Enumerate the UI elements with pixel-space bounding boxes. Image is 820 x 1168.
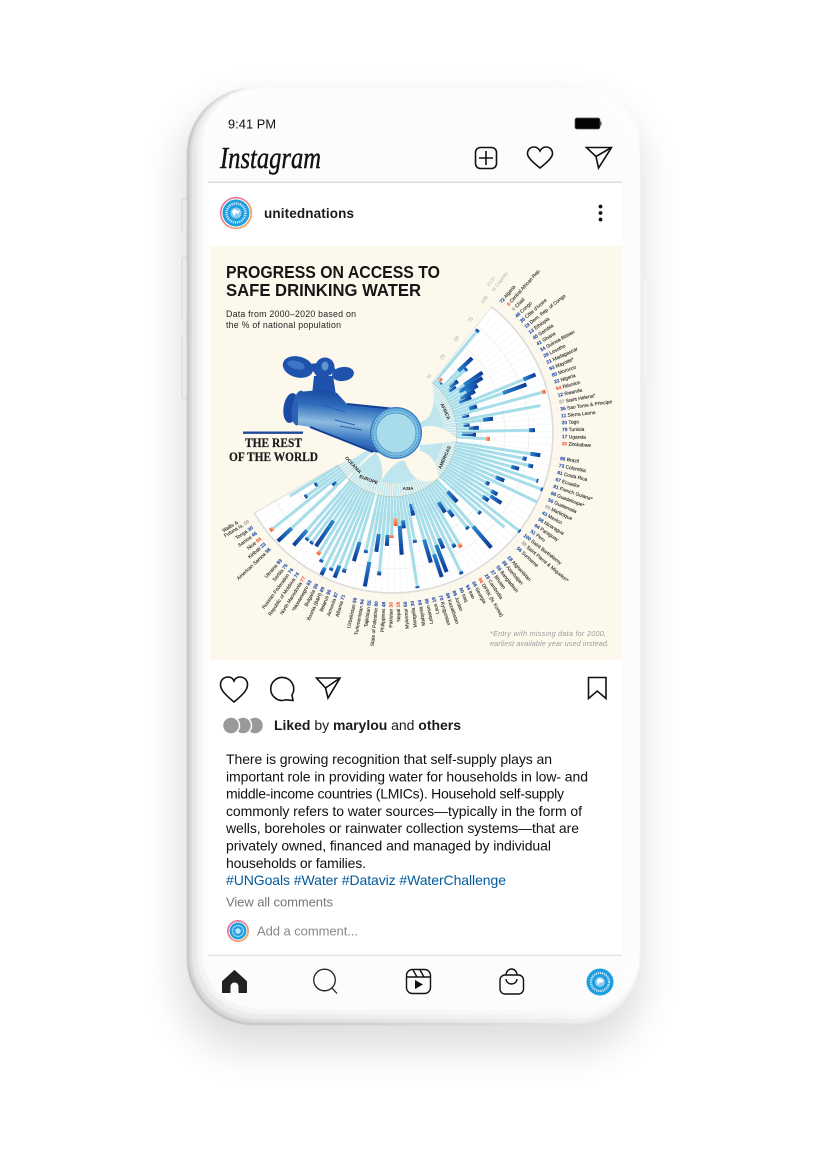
rest of the world label: THE REST bbox=[245, 436, 303, 450]
icon: top send bbox=[586, 148, 612, 168]
tap handle bbox=[280, 353, 355, 395]
country labels: Asia: 89 Kazakhstan bbox=[444, 592, 460, 625]
add comment: Add a comment... bbox=[257, 924, 358, 938]
country labels: Europe: Bulgaria 98 bbox=[304, 583, 320, 608]
icon: bookmark bbox=[588, 678, 606, 698]
axis scale labels bbox=[426, 271, 510, 380]
country labels: Europe: *Montenegro 83 bbox=[291, 579, 314, 613]
region labels: EUROPE bbox=[359, 474, 378, 485]
country labels: Africa: 93 Mayotte* bbox=[548, 357, 575, 372]
icon: share bbox=[316, 678, 340, 698]
icon: shop bag bbox=[500, 969, 524, 994]
country labels: Asia: 70 Kyrgyzstan bbox=[437, 595, 451, 626]
bars: Americas bbox=[439, 441, 543, 533]
country labels: Africa: 80 Morocco bbox=[551, 364, 577, 379]
title: PROGRESS ON ACCESS TO bbox=[226, 262, 440, 282]
bars: Africa bbox=[432, 328, 546, 441]
country labels: Asia: Philippines 48 bbox=[380, 601, 388, 632]
country labels: Africa: 13 Ethiopia bbox=[528, 316, 551, 336]
axis scale labels: 25 bbox=[439, 353, 447, 361]
axis scale labels: % bbox=[426, 373, 434, 380]
country labels: Europe: Belarus 95 bbox=[319, 589, 333, 613]
country labels: Oceania: Wallis & bbox=[221, 519, 240, 534]
country labels: Africa: 21 Madagascar bbox=[546, 346, 579, 366]
country labels: Oceania: Tonga 30 bbox=[235, 525, 255, 541]
country labels: Asia: 66 Georgia bbox=[470, 581, 487, 605]
country labels: Oceania: American Samoa 98 bbox=[236, 547, 273, 582]
region labels: AFRICA bbox=[439, 402, 452, 421]
country labels: Africa bbox=[499, 268, 613, 449]
icon: new post bbox=[476, 148, 496, 168]
country labels: Asia: Nepal 18 bbox=[396, 602, 402, 622]
icon: home bbox=[222, 970, 246, 992]
country labels: Africa: 29 Lesotho bbox=[543, 343, 567, 360]
axis scale labels: % Country bbox=[491, 271, 510, 293]
caption text: wells, boreholes or rainwater collection systems—that are bbox=[225, 820, 579, 836]
axis scale labels: 100 bbox=[480, 295, 490, 305]
footnote bbox=[490, 629, 609, 648]
country labels: Africa: 12 Rwanda bbox=[557, 387, 583, 399]
footnote: earliest available year used instead. bbox=[490, 639, 609, 648]
country labels: Africa: 79 Tunisia bbox=[562, 427, 585, 433]
country labels: Asia: 88 Azerbaijan bbox=[500, 560, 524, 586]
country labels: Asia: Uzbekistan 59 bbox=[346, 597, 359, 629]
country labels: Europe: Serbia 75 bbox=[272, 563, 290, 583]
country labels: Africa: 6 Chad bbox=[509, 297, 527, 314]
country labels: Africa: 35 Côte d'Ivoire bbox=[519, 298, 549, 325]
region labels: ASIA bbox=[403, 486, 414, 491]
country labels: Africa: 17 Uganda bbox=[562, 434, 586, 441]
panel: infographic bbox=[210, 246, 622, 660]
instagram logo: Instagram bbox=[219, 140, 321, 175]
axis scale labels: 50 bbox=[453, 335, 461, 343]
country labels: Americas: 67 Ecuador bbox=[555, 477, 581, 490]
country labels: Americas: 58 Nicaragua bbox=[537, 517, 565, 537]
tap body bbox=[281, 390, 410, 455]
icon: more dots bbox=[599, 205, 602, 221]
country labels: Americas: 51 Peru bbox=[529, 529, 546, 544]
country labels: Asia: 60 Iraq bbox=[457, 587, 469, 604]
icon: battery bbox=[575, 118, 602, 129]
radial chart bbox=[221, 268, 613, 646]
country labels: Asia: Malaysia 94 bbox=[417, 599, 427, 626]
country labels: Americas: 64 Paraguay bbox=[533, 523, 560, 543]
tap spout opening bbox=[370, 407, 422, 459]
caption text: There is growing recognition that self-supply plays an bbox=[226, 751, 552, 767]
caption text: households or families. bbox=[226, 855, 366, 871]
country labels: Africa: 30 Zimbabwe bbox=[561, 441, 591, 449]
top divider bbox=[208, 182, 622, 183]
country labels: Africa: 22 Nigeria bbox=[553, 373, 577, 385]
country labels: Asia: 59 Bangladesh bbox=[494, 565, 519, 594]
rest of the world label: OF THE WORLD bbox=[229, 450, 318, 464]
footnote: *Entry with missing data for 2000, bbox=[490, 629, 606, 638]
caption text bbox=[225, 751, 588, 871]
country labels: Oceania: Samoa 46 bbox=[237, 531, 259, 549]
title: SAFE DRINKING WATER bbox=[226, 280, 421, 300]
chart background fan bbox=[254, 307, 553, 593]
country labels: Africa: 72 Algeria bbox=[499, 284, 517, 305]
country labels: Asia: 28 Afghanistan bbox=[506, 555, 532, 583]
country labels: Asia: Pakistan 36 bbox=[388, 602, 395, 628]
country labels: Africa: 34 Guinea-Bissau bbox=[539, 329, 576, 353]
subtitle: Data from 2000–2020 based on bbox=[226, 309, 356, 319]
phone screen bbox=[205, 101, 625, 1006]
caption text: important role in providing water for households in low- and bbox=[226, 768, 588, 784]
country labels: Asia: Lebanon 48 bbox=[424, 598, 435, 624]
region labels bbox=[344, 402, 452, 491]
small avatar bbox=[227, 920, 249, 942]
fans connecting tap to regions bbox=[338, 383, 457, 497]
icon: comment bbox=[271, 677, 294, 700]
country labels: Asia: 28 Cambodia bbox=[483, 573, 504, 601]
region labels: AMERICAS bbox=[437, 445, 452, 470]
axis scale labels: 75 bbox=[467, 316, 475, 324]
country labels: Europe: Russian Federation 76 bbox=[261, 567, 295, 610]
country labels: Africa: 41 Ghana bbox=[536, 331, 557, 347]
country labels: Americas: 56 Suriname bbox=[515, 546, 540, 569]
country labels: Americas: 81 Costa Rica bbox=[556, 470, 588, 483]
country labels: Europe: Bosnia (B&H) 89 bbox=[306, 586, 327, 622]
subtitle: the % of national population bbox=[226, 320, 341, 330]
bars: Asia bbox=[363, 478, 493, 588]
hashtags: #UNGoals #Water #Dataviz #WaterChallenge bbox=[226, 872, 506, 888]
country labels: Oceania: Futuna Is. 59 bbox=[223, 519, 251, 539]
country labels: Europe bbox=[261, 558, 347, 622]
profile avatar bbox=[219, 196, 253, 230]
country labels: Americas: 86 Brazil bbox=[560, 456, 579, 465]
subtitle bbox=[226, 309, 356, 330]
country labels: Europe: Republic of Moldova 74 bbox=[267, 571, 301, 617]
country labels: Africa: 46 Congo bbox=[514, 300, 534, 319]
country labels: Americas: 91 French Guiana* bbox=[552, 484, 593, 503]
caption text: middle-income countries (LMICs). Household self-supply bbox=[226, 786, 564, 802]
bars: Oceania bbox=[269, 465, 348, 543]
country labels: Europe: Armenia 87 bbox=[326, 591, 340, 617]
icon: reels bbox=[406, 970, 430, 994]
country labels: Europe: Ukraine 89 bbox=[264, 558, 284, 580]
view comments: View all comments bbox=[226, 894, 334, 910]
country labels: Oceania: Niue 94 bbox=[246, 536, 263, 552]
country labels: Asia: Tajikistan 55 bbox=[363, 600, 373, 628]
country labels: Africa: 20 Togo bbox=[562, 419, 579, 426]
country labels: Africa: 19 Dem. Rep. of Congo bbox=[523, 293, 567, 330]
bars: Europe bbox=[292, 480, 376, 578]
icon: top heart bbox=[528, 147, 552, 168]
country labels: Americas: 43 Mexico bbox=[540, 510, 563, 526]
country labels: Americas: 100 Saint Barthélemy bbox=[522, 533, 563, 567]
country labels: Africa: 94 Réunion bbox=[555, 380, 581, 392]
country labels: Asia: 86 Jordan bbox=[450, 590, 464, 613]
caption text: privately owned, financed and managed by individual bbox=[226, 838, 551, 854]
country labels: Oceania: Kiribati 23 bbox=[247, 542, 268, 560]
status bar time: 9:41 PM bbox=[228, 116, 276, 132]
country labels: Africa: 87 Saint Helena* bbox=[559, 393, 596, 406]
rest of the world label bbox=[229, 432, 318, 464]
country labels: Africa: 36 Sao Tome & Principe bbox=[560, 399, 613, 413]
country labels: Americas: 99 Martinique bbox=[544, 504, 573, 522]
country labels: Asia: Myanmar 60 bbox=[403, 601, 411, 629]
profile tab avatar bbox=[586, 968, 614, 996]
country labels: Oceania bbox=[221, 519, 273, 582]
icon: action heart bbox=[220, 677, 248, 702]
liked by text: Liked by marylou and others bbox=[274, 717, 461, 733]
country labels: Asia: Laos 18 bbox=[431, 596, 441, 615]
username: unitednations bbox=[264, 206, 354, 221]
country labels: Americas: 56 Guatemala bbox=[547, 497, 578, 515]
country labels: Asia: 66 DPRK (N. Korea) bbox=[476, 577, 504, 618]
country labels: Americas: 85 Saint Pierre & Miquelon* bbox=[520, 540, 570, 584]
title bbox=[226, 262, 440, 300]
country labels: Asia: Turkmenistan 94 bbox=[354, 599, 366, 636]
country labels: Africa: 11 Sierra Leone bbox=[561, 410, 596, 419]
country labels: Africa: 6 Central African Rep. bbox=[504, 268, 542, 310]
icon: water tap illustration bbox=[280, 353, 422, 459]
country labels: Americas: 98 Guadeloupe* bbox=[550, 491, 585, 509]
axis scale labels: 2020 bbox=[486, 276, 497, 288]
bottom divider bbox=[208, 954, 622, 956]
phone shadow bbox=[180, 105, 642, 1050]
country labels: Asia: State of Palestine 80 bbox=[370, 601, 380, 646]
liked-by avatars bbox=[222, 717, 264, 734]
country labels: Asia bbox=[346, 555, 532, 646]
country labels: Asia: Mongolia 30 bbox=[410, 600, 419, 628]
country labels: Asia: 37 Bhutan bbox=[489, 569, 507, 591]
country labels: Asia: 94 Iran bbox=[464, 584, 476, 600]
country labels: Americas bbox=[515, 456, 593, 584]
country labels: Americas: 73 Colombia bbox=[558, 463, 587, 474]
icon: search bbox=[314, 969, 337, 994]
region labels: OCEANIA bbox=[344, 456, 363, 475]
country labels: Africa: 45 Gambia bbox=[532, 323, 555, 341]
phone side buttons bbox=[182, 199, 648, 398]
country labels: Europe: Albania 71 bbox=[335, 594, 347, 618]
phone body bbox=[187, 88, 641, 1025]
caption text: commonly refers to water sources—typically in the form of bbox=[226, 803, 582, 819]
country labels: Europe: North Macedonia 77 bbox=[279, 575, 307, 616]
